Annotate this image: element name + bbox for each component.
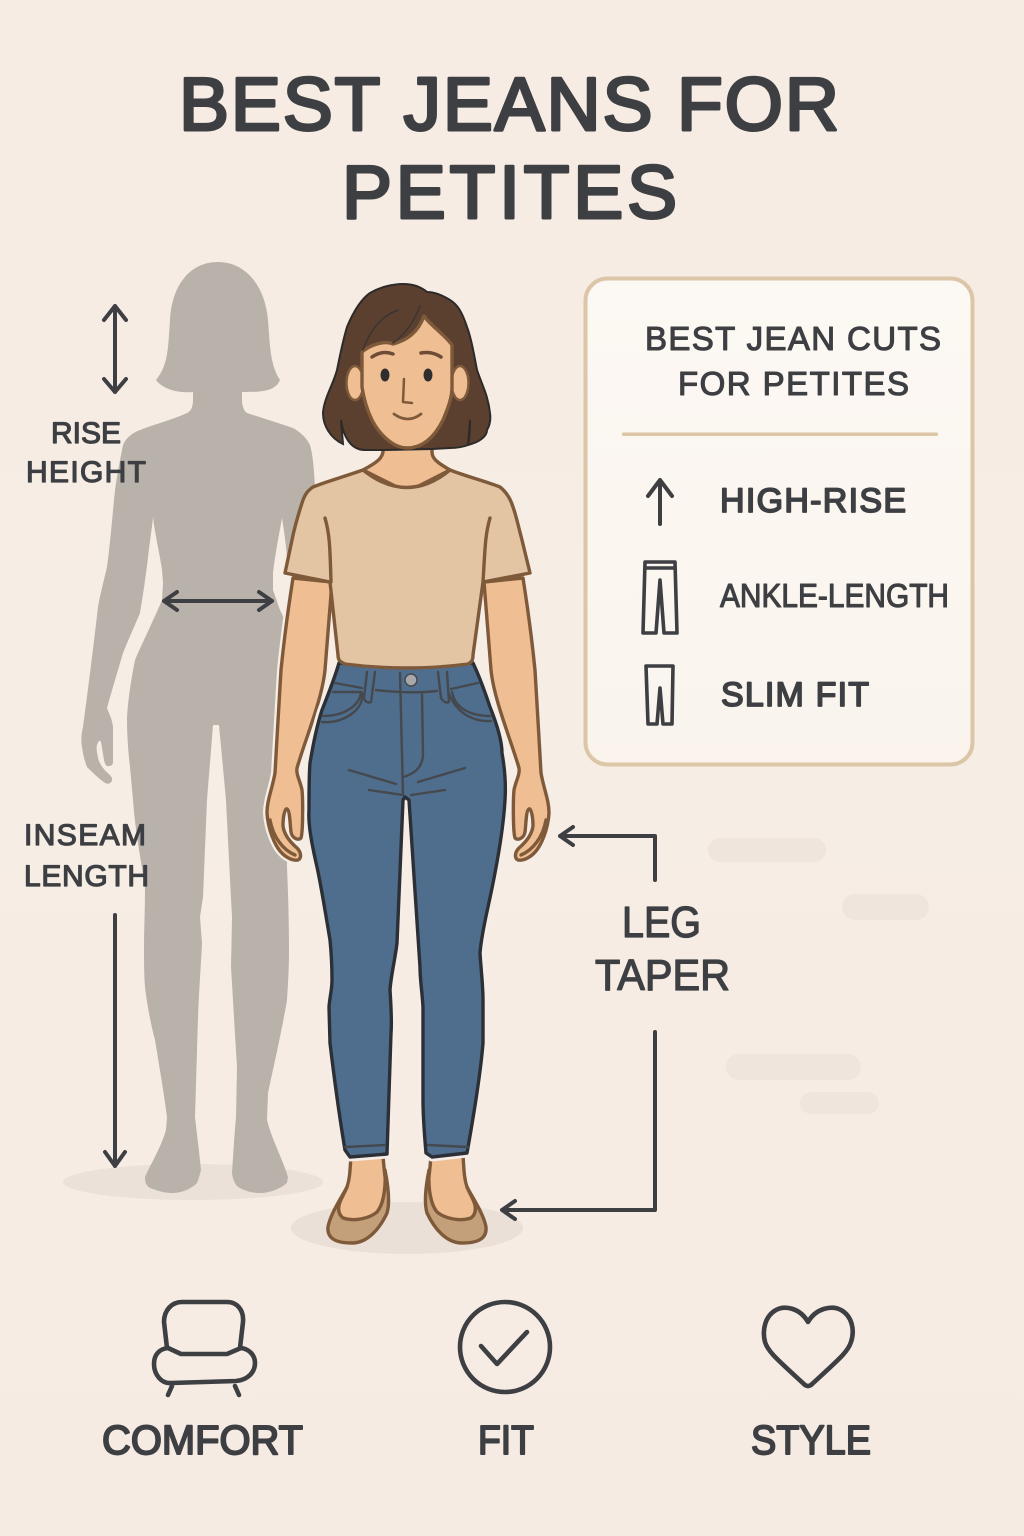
label: inseam length <box>24 819 149 893</box>
panel heading: BEST JEAN CUTS <box>645 320 941 357</box>
benefit: comfort <box>102 1302 303 1463</box>
text: slim fit: SLIM FIT <box>721 676 869 714</box>
woman floor shadow <box>291 1202 523 1254</box>
icon: slim fit jeans <box>646 666 673 724</box>
label: fit: FIT <box>478 1417 534 1463</box>
jeans <box>309 663 505 1157</box>
arrow: leg taper up <box>560 827 655 880</box>
right foot and shoe <box>426 1155 486 1243</box>
label: inseam length: INSEAM <box>24 819 146 852</box>
head and hair <box>323 284 490 450</box>
panel heading: FOR PETITES <box>678 365 909 402</box>
label: leg taper <box>595 898 730 1000</box>
icon: up arrow <box>648 480 672 524</box>
benefit: fit <box>460 1302 550 1463</box>
label: rise height <box>26 417 146 489</box>
background smudges <box>708 838 929 1114</box>
arrow: rise height <box>104 306 126 392</box>
arrow: inseam length <box>105 915 125 1166</box>
text: ankle-length: ANKLE-LENGTH <box>720 577 949 614</box>
label: leg taper: TAPER <box>595 951 730 1000</box>
label: rise height: HEIGHT <box>26 456 146 489</box>
icon: ankle-length jeans <box>643 562 677 633</box>
panel heading <box>645 320 941 402</box>
silhouette ground shadow <box>63 1164 323 1200</box>
label: style: STYLE <box>751 1417 871 1463</box>
text: high-rise: HIGH-RISE <box>720 482 906 520</box>
arrow: waist width <box>164 592 272 610</box>
figure: woman in jeans <box>267 284 549 1243</box>
panel: best jean cuts <box>586 278 972 764</box>
label: comfort: COMFORT <box>102 1417 303 1463</box>
icon: check circle <box>460 1302 550 1392</box>
title <box>179 62 839 234</box>
left arm <box>267 578 332 860</box>
icon: armchair <box>154 1302 255 1395</box>
title: BEST JEANS FOR <box>179 62 839 146</box>
left foot and shoe <box>328 1155 388 1243</box>
silhouette figure <box>81 262 315 1193</box>
label: rise height: RISE <box>51 417 121 450</box>
label: leg taper: LEG <box>622 898 701 947</box>
benefit: style <box>751 1308 871 1463</box>
label: inseam length: LENGTH <box>24 860 149 893</box>
t-shirt <box>285 430 530 668</box>
title: PETITES <box>342 150 677 234</box>
icon: heart <box>764 1308 853 1386</box>
right arm <box>484 578 549 860</box>
arrow: leg taper down <box>502 1032 655 1219</box>
